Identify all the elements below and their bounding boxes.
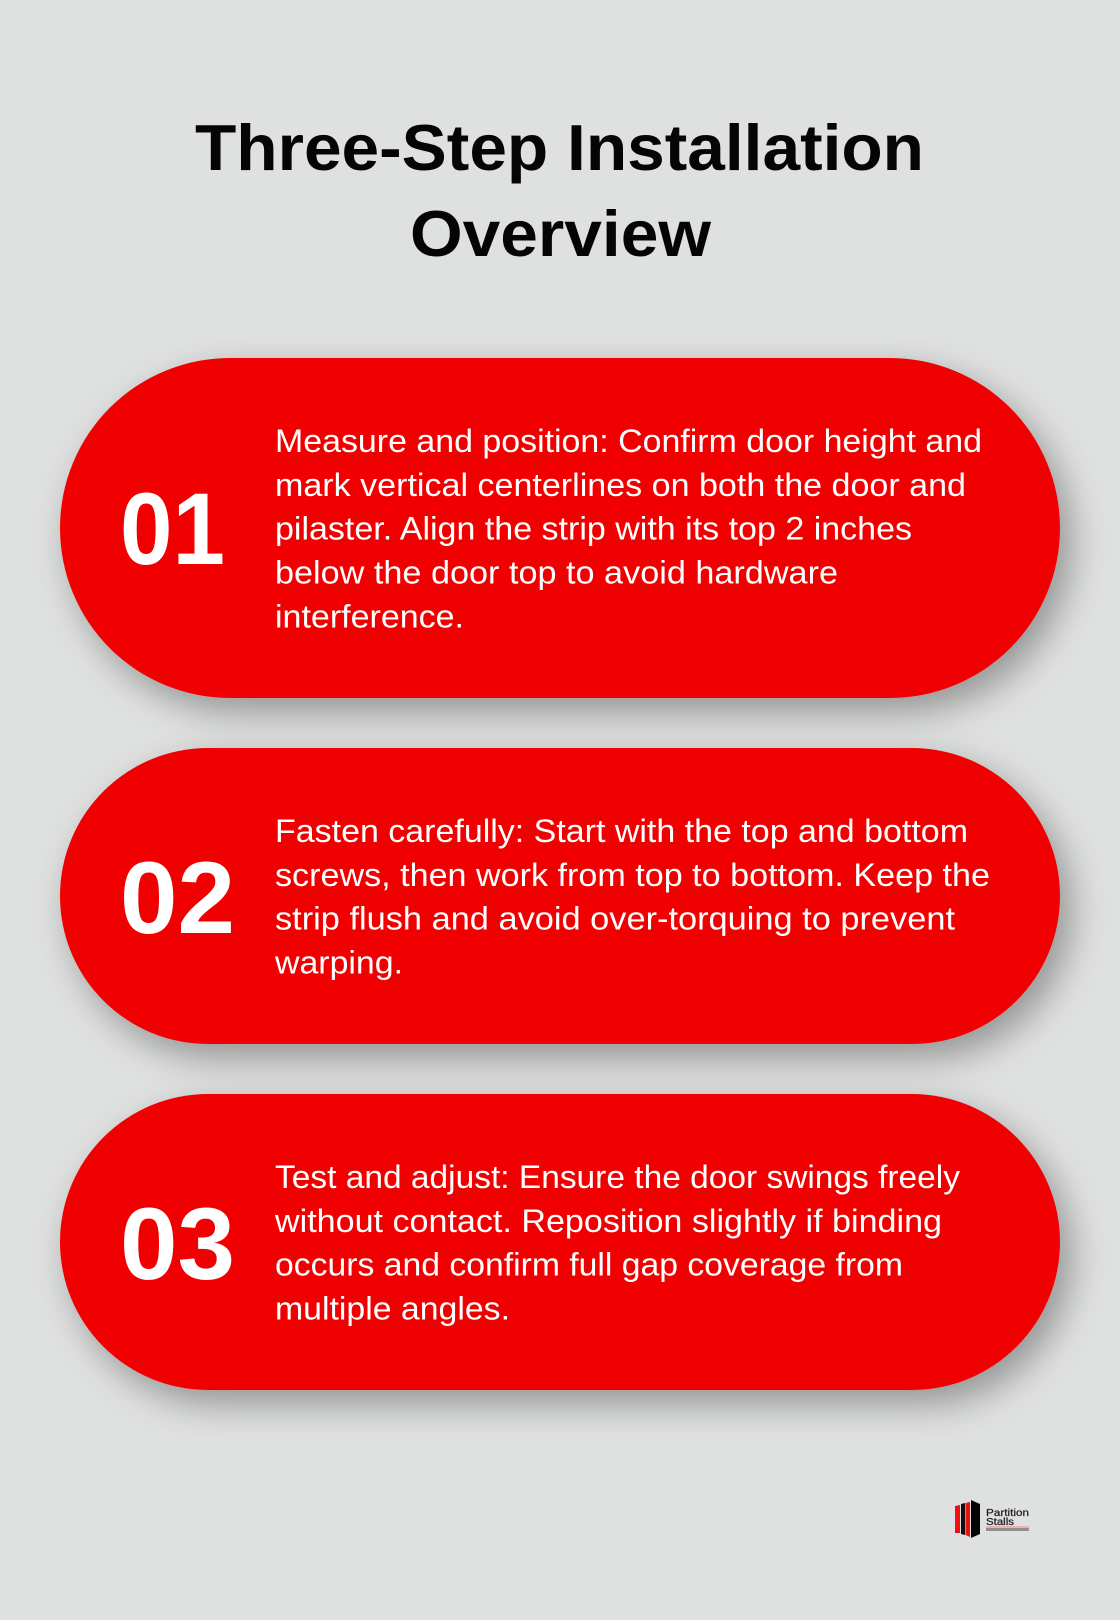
step 1 description: below the door top to avoid hardware (275, 555, 838, 591)
step 3 description: multiple angles. (275, 1291, 510, 1327)
logo wordmark (986, 1508, 1029, 1531)
step 1 description: interference. (275, 598, 464, 634)
logo: Partition Stalls (955, 1500, 1029, 1538)
step 2 description: Fasten carefully: Start with the top and bottom (275, 813, 968, 849)
step 3 description: occurs and confirm full gap coverage from (275, 1247, 903, 1283)
step number 03: 03 (120, 1187, 235, 1301)
panel: step 2 (60, 748, 1060, 1044)
step 2 description: warping. (274, 945, 403, 981)
panel: step 1 (60, 358, 1060, 698)
step 1 description: pilaster. Align the strip with its top 2 inches (275, 511, 912, 547)
step 1 description: mark vertical centerlines on both the door and (275, 467, 966, 503)
step 2 description: screws, then work from top to bottom. Keep the (275, 857, 990, 893)
panel: step 3 (60, 1094, 1060, 1390)
step 1 description (275, 423, 982, 634)
step 3 description (274, 1159, 961, 1327)
step 2 description: strip flush and avoid over-torquing to prevent (275, 901, 955, 937)
title (195, 111, 924, 270)
logo wordmark: Stalls (986, 1517, 1014, 1528)
step 3 description: Test and adjust: Ensure the door swings freely (275, 1159, 961, 1195)
title: Three-Step Installation (195, 111, 924, 184)
logo wordmark: Partition (986, 1508, 1029, 1519)
step 2 description (274, 813, 990, 981)
step number 01: 01 (120, 472, 225, 586)
step 1 description: Measure and position: Confirm door height and (275, 423, 982, 459)
step 3 description: without contact. Reposition slightly if binding (274, 1203, 942, 1239)
step number 02: 02 (120, 841, 235, 955)
icon: partition panels (955, 1500, 980, 1538)
title: Overview (410, 197, 711, 270)
